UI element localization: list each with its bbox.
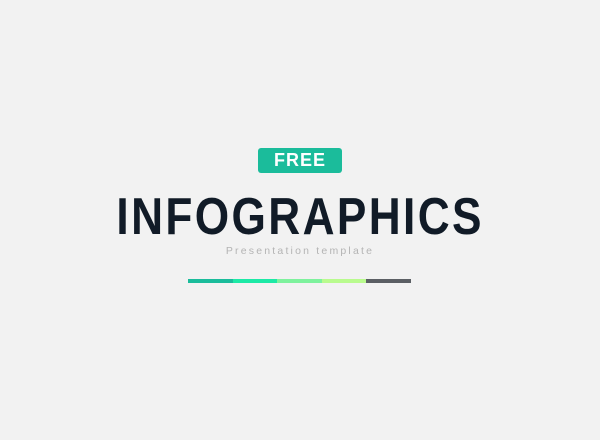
color bar [188,279,411,283]
badge: FREE [258,148,342,173]
subtitle: Presentation template [226,245,374,257]
badge: FREE: FREE [274,150,326,170]
title: INFOGRAPHICS [116,188,484,246]
